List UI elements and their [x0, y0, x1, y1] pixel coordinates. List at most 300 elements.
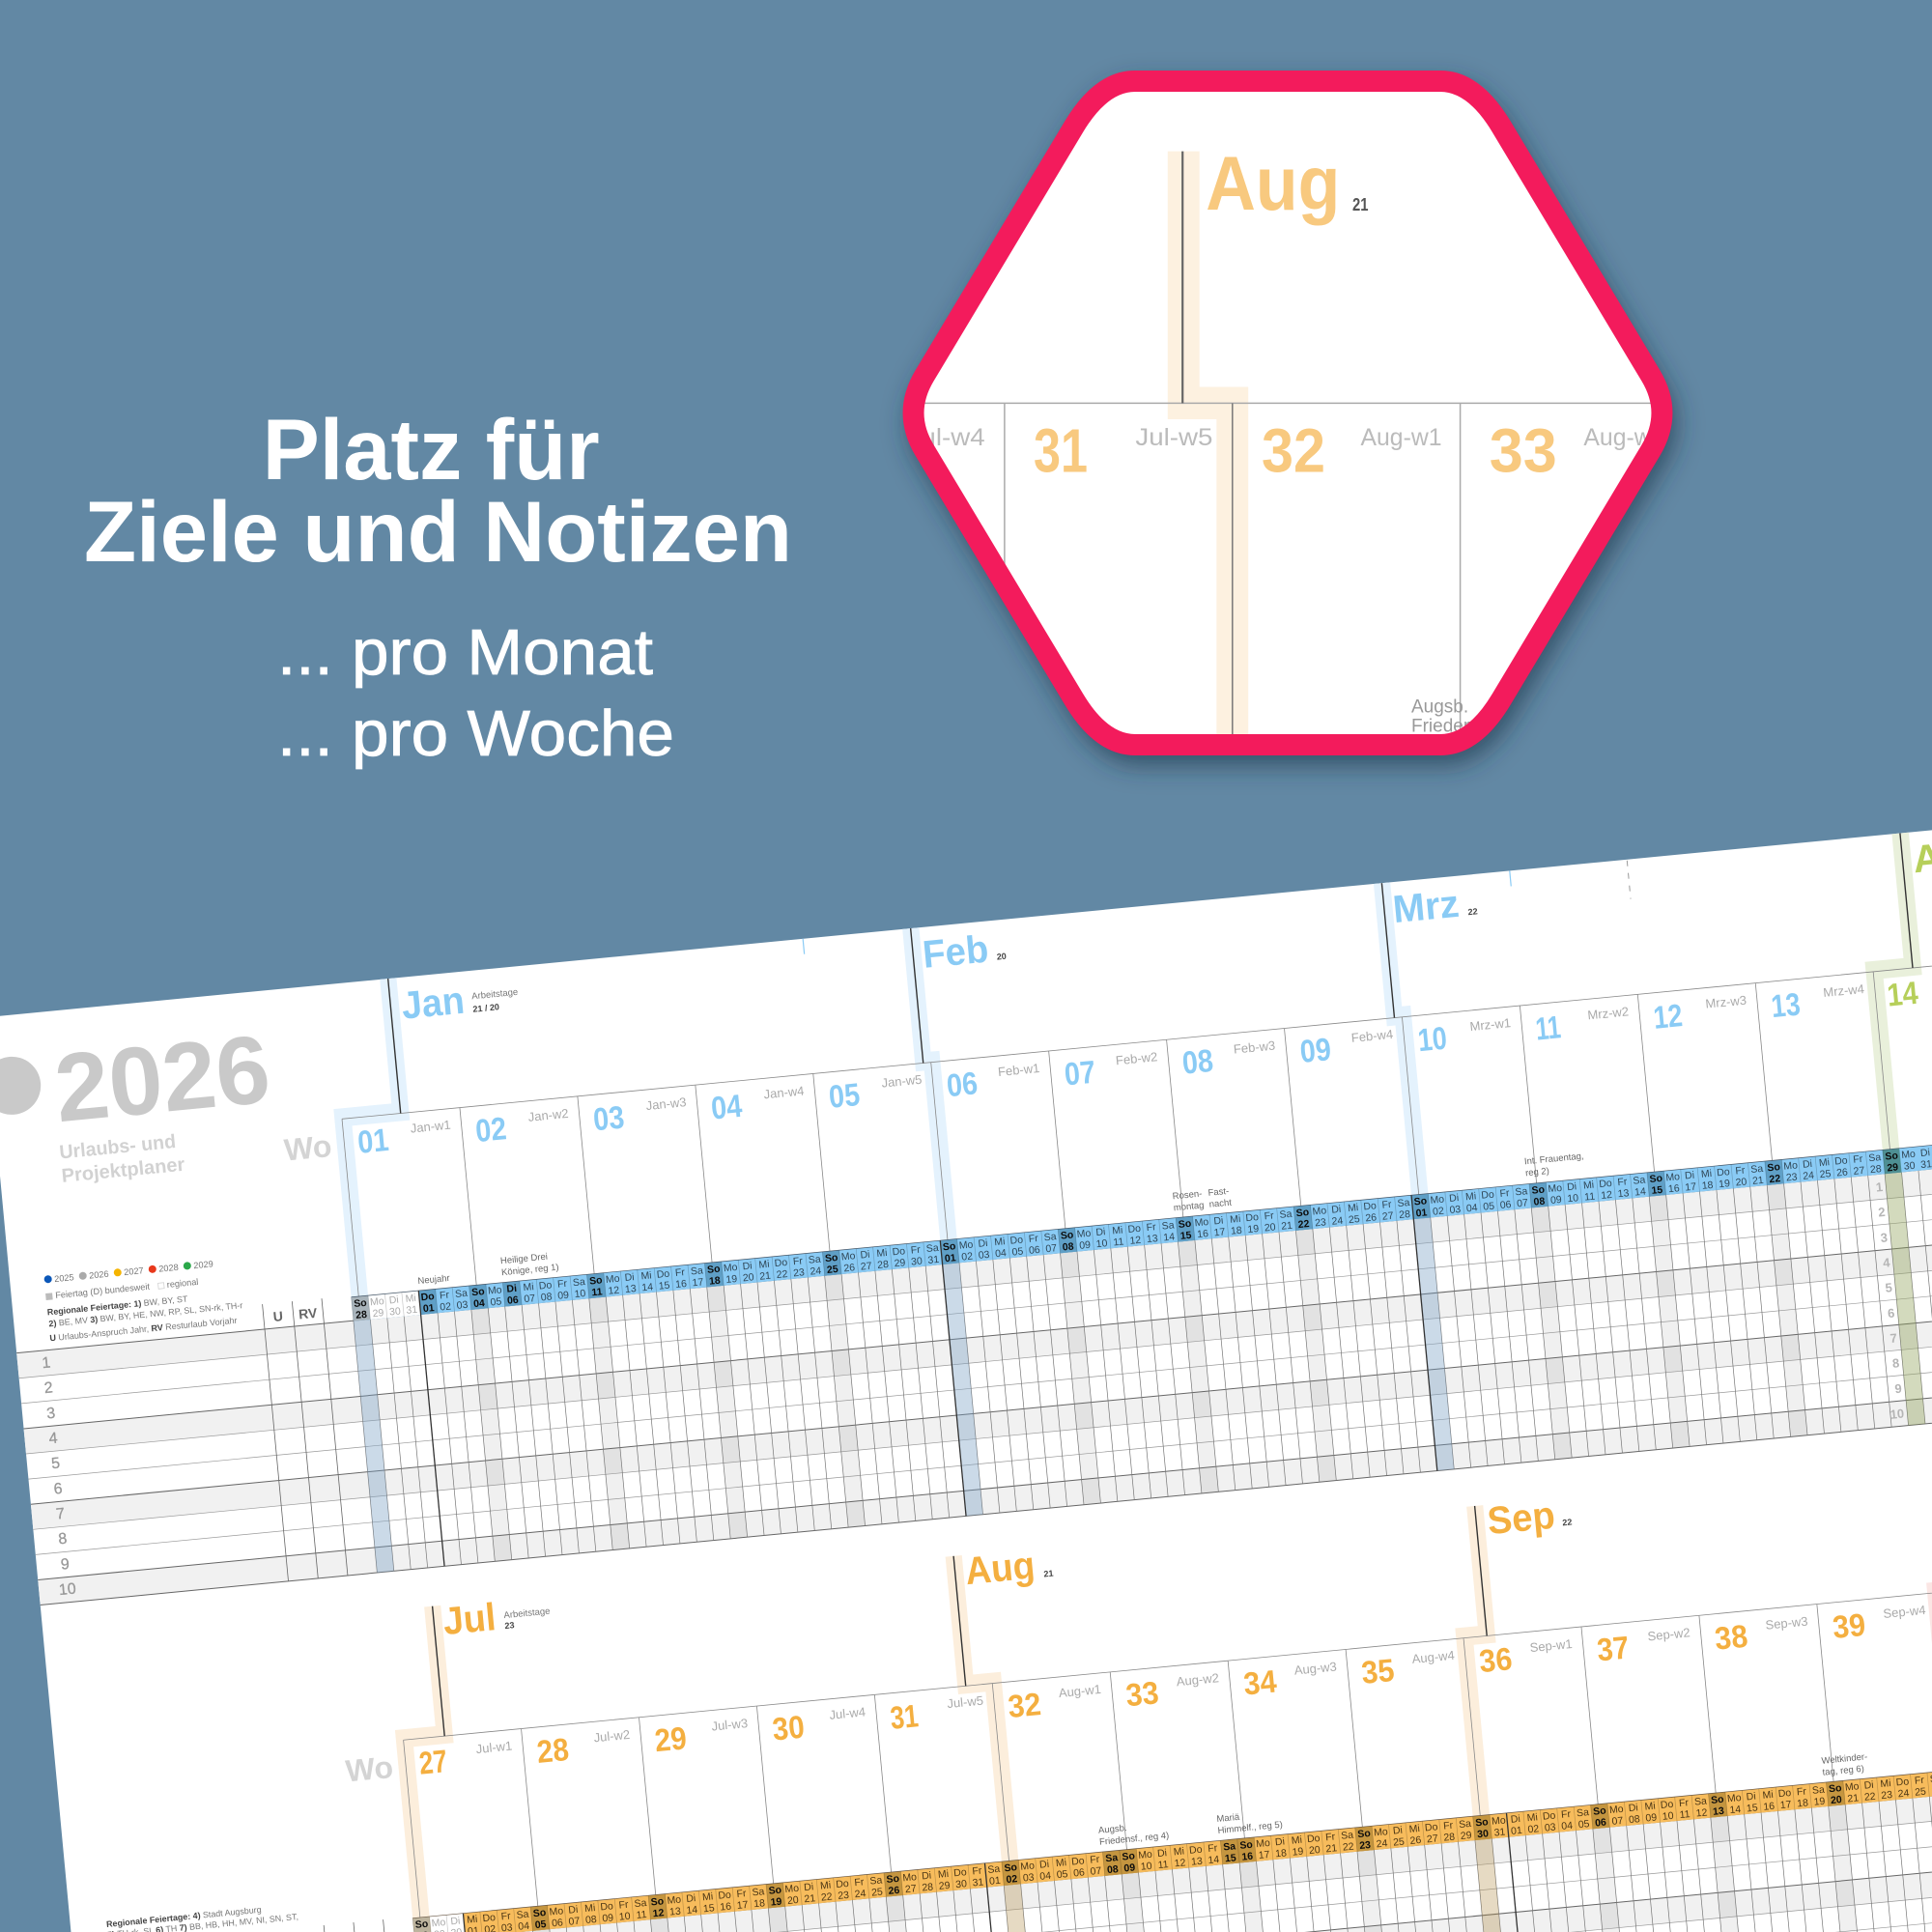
month names: Jul	[441, 1596, 497, 1643]
day header text: Sa	[808, 1254, 821, 1266]
day header text: Fr	[854, 1876, 865, 1889]
day header text: Mi	[820, 1880, 832, 1892]
day header text: Mi	[1465, 1190, 1477, 1203]
block: second half year July to September	[46, 1435, 1932, 1932]
holiday notes: montag	[1173, 1200, 1205, 1213]
day header text: Fr	[736, 1888, 748, 1900]
day header text: 05	[1577, 1818, 1590, 1831]
first-of-month column tints	[354, 1217, 1454, 1573]
day header text: So	[1178, 1218, 1192, 1231]
month names: Arbeitstage	[471, 987, 519, 1002]
day header text: Di	[1274, 1835, 1285, 1848]
april column tint	[1885, 1172, 1925, 1426]
day header text: Do	[1307, 1833, 1321, 1845]
day header text: Mi	[1173, 1845, 1185, 1858]
week numbers: 08	[1180, 1042, 1214, 1081]
week numbers: 35	[1360, 1652, 1396, 1690]
day header text: Sa	[1515, 1185, 1528, 1198]
week numbers: 07	[1063, 1054, 1097, 1092]
month names: Sep	[1486, 1494, 1557, 1543]
day header text: 24	[1897, 1787, 1910, 1800]
day header text: Di	[1392, 1825, 1403, 1837]
table column heads	[272, 1305, 319, 1324]
day header text: So	[1475, 1816, 1489, 1829]
week numbers: Feb-w3	[1233, 1038, 1276, 1057]
day header text: Fr	[1735, 1165, 1746, 1178]
day header text: 09	[1123, 1861, 1136, 1874]
day header text: 02	[961, 1251, 974, 1264]
magnified calendar detail: Friedensf., reg 4)	[1411, 717, 1551, 736]
day header text: So	[1885, 1150, 1898, 1163]
row labels right: 5	[1885, 1280, 1893, 1295]
day header text: Di	[1095, 1226, 1106, 1238]
day header text: 17	[1685, 1180, 1697, 1194]
week numbers: 09	[1298, 1031, 1332, 1069]
day header text: 18	[753, 1897, 766, 1910]
week numbers: 04	[709, 1088, 744, 1126]
day header text: 21	[804, 1892, 816, 1905]
magnified calendar detail: 21	[1352, 195, 1368, 214]
day header text: Di	[1331, 1204, 1342, 1216]
day header text: So	[942, 1240, 956, 1253]
day header text: Mo	[370, 1295, 384, 1308]
day header text: 29	[1887, 1161, 1899, 1174]
day header text: Do	[1424, 1821, 1438, 1833]
week numbers: 12	[1652, 997, 1684, 1036]
day header text: 14	[686, 1904, 698, 1917]
day header text: 12	[1601, 1189, 1613, 1202]
day header text: 26	[888, 1885, 900, 1897]
day header text: Do	[1189, 1844, 1203, 1857]
day header text: 01	[422, 1302, 435, 1315]
day header text: 20	[787, 1894, 799, 1907]
day header text: 08	[1628, 1813, 1640, 1826]
day header text: Mo	[784, 1883, 800, 1895]
day header text: Fr	[1499, 1187, 1510, 1200]
day header text: 12	[1129, 1235, 1142, 1247]
day header text: Mo	[1138, 1849, 1153, 1861]
week numbers: 33	[1124, 1674, 1160, 1713]
day header text: 25	[871, 1886, 884, 1899]
day header text: 14	[1729, 1804, 1742, 1816]
day header text: Mo	[1020, 1860, 1036, 1873]
day header text: Fr	[972, 1865, 982, 1877]
day header text: 25	[1348, 1213, 1360, 1226]
holiday notes: Rosen-	[1172, 1189, 1203, 1202]
legend: 2) BE, MV 3) BW, BY, HE, NW, RP, SL, SN-rk, TH-r	[48, 1300, 243, 1328]
day header text: 28	[1399, 1208, 1411, 1221]
day header text: 05	[1056, 1868, 1068, 1881]
headline text	[84, 401, 792, 770]
day header text: Sa	[1459, 1818, 1472, 1831]
week numbers: 31	[889, 1697, 920, 1736]
row labels left: 6	[53, 1481, 63, 1498]
day header text: 07	[568, 1916, 581, 1928]
day header text: 16	[675, 1278, 688, 1291]
day header text: 03	[1449, 1204, 1462, 1216]
day header text: Sa	[1341, 1830, 1354, 1842]
day header text: 26	[843, 1262, 856, 1274]
day header text: Mo	[1492, 1814, 1506, 1828]
day header text: So	[824, 1252, 838, 1264]
day header text: 16	[1763, 1801, 1776, 1813]
day header text: Di	[1449, 1192, 1460, 1205]
week numbers: Jan-w4	[763, 1083, 805, 1101]
magnified calendar detail: 32	[1262, 415, 1325, 485]
day header text: Sa	[1279, 1208, 1293, 1221]
day header text: Di	[978, 1237, 988, 1250]
day header text: 13	[1146, 1233, 1158, 1245]
day header text: Di	[686, 1892, 696, 1905]
day header text: Mo	[1726, 1792, 1742, 1804]
week numbers: Sep-w2	[1647, 1625, 1690, 1643]
day header text: Sa	[572, 1276, 586, 1289]
day header text: 07	[1611, 1815, 1624, 1828]
week numbers: Jan-w3	[645, 1094, 687, 1113]
day header text: 22	[1297, 1218, 1310, 1231]
row labels left: 10	[58, 1580, 77, 1599]
day header text: 18	[1275, 1847, 1288, 1860]
day header text: Do	[1660, 1799, 1674, 1811]
day header background	[352, 1143, 1932, 1321]
day header text: 09	[1079, 1239, 1092, 1252]
day header text: Di	[1863, 1779, 1874, 1792]
day header text: 18	[1231, 1225, 1242, 1237]
day header text: 27	[904, 1883, 917, 1895]
day header text: 15	[1746, 1802, 1758, 1814]
Wo label: Wo	[344, 1749, 394, 1789]
day header text: So	[1122, 1850, 1135, 1863]
day header text: 10	[1140, 1861, 1152, 1873]
day header text: Do	[1717, 1166, 1730, 1179]
day header text: Di	[1919, 1147, 1930, 1159]
day header text: Sa	[1750, 1163, 1764, 1176]
day header text: Mo	[1665, 1171, 1681, 1183]
day header text: 06	[552, 1917, 564, 1929]
headline text: Platz für	[263, 401, 600, 497]
day header text: 20	[1264, 1221, 1276, 1234]
legend: Regionale Feiertage: 1) BW, BY, ST	[46, 1293, 188, 1317]
day header text: 20	[1735, 1176, 1747, 1189]
day header text: 27	[1853, 1165, 1865, 1178]
day header text: 09	[557, 1290, 570, 1302]
day header text: Do	[482, 1912, 497, 1924]
day header text: 23	[1881, 1789, 1893, 1802]
day header text: 29	[1460, 1830, 1472, 1842]
magnified calendar detail	[925, 151, 1650, 734]
day header text: Mi	[1644, 1801, 1656, 1813]
day header text: Sa	[1397, 1197, 1410, 1209]
week numbers: 06	[945, 1065, 980, 1103]
day header text: Mi	[1818, 1156, 1831, 1169]
day header text: 15	[1224, 1852, 1236, 1864]
bold month grid lines	[463, 1813, 1532, 1932]
legend: U Urlaubs-Anspruch Jahr, RV Resturlaub Vorjahr	[49, 1316, 238, 1343]
week numbers: 28	[535, 1731, 570, 1770]
month bands	[322, 833, 1932, 1297]
day header text: Fr	[500, 1910, 512, 1922]
day header text: Sa	[1105, 1852, 1119, 1864]
day header text: 15	[1651, 1184, 1663, 1197]
day header text: 25	[1819, 1168, 1832, 1180]
day header text: Sa	[1633, 1175, 1646, 1187]
day header text: Fr	[910, 1244, 922, 1257]
day header text: Mo	[1312, 1205, 1327, 1218]
day header text: 22	[820, 1891, 833, 1904]
magnified calendar detail: Aug-w1	[1360, 424, 1441, 451]
day header text: 05	[1011, 1245, 1024, 1259]
day header text: Mo	[1609, 1804, 1624, 1816]
row labels right: 8	[1891, 1355, 1900, 1371]
day header text: Fr	[1796, 1785, 1807, 1798]
holiday notes	[416, 1151, 1585, 1287]
day header text	[414, 1773, 1932, 1932]
month names: Aug	[963, 1544, 1037, 1593]
week numbers: Jan-w5	[881, 1072, 923, 1091]
subtitle: Projektplaner	[61, 1154, 185, 1187]
day header background	[412, 1761, 1932, 1932]
day header text: Sa	[634, 1897, 647, 1910]
holiday notes: Könige, reg 1)	[501, 1263, 559, 1278]
day header text: Mi	[1112, 1225, 1123, 1237]
day header text: Mo	[1901, 1149, 1917, 1161]
day header text: 31	[406, 1304, 418, 1317]
day header text: 22	[1863, 1791, 1876, 1804]
week numbers: 11	[1534, 1009, 1562, 1047]
week numbers: Jul-w4	[829, 1704, 867, 1722]
day header text: So	[1767, 1161, 1780, 1174]
day header text: 22	[1342, 1841, 1354, 1854]
week numbers	[417, 1601, 1928, 1781]
day header text: Do	[1542, 1809, 1556, 1823]
day header text: Do	[1834, 1154, 1848, 1168]
legend: 2026	[89, 1269, 109, 1281]
week numbers: Mrz-w3	[1705, 993, 1747, 1011]
day header text: 21	[1752, 1175, 1764, 1187]
row labels right: 1	[1875, 1179, 1884, 1195]
subtitle: Urlaubs- und	[58, 1131, 177, 1163]
month names: 21 / 20	[472, 1002, 499, 1014]
day header text: 23	[1359, 1839, 1372, 1852]
Wo label: Wo	[283, 1128, 333, 1168]
week numbers: Feb-w2	[1115, 1049, 1158, 1067]
magnified calendar detail: Aug-w2	[1583, 424, 1664, 451]
day header text: 06	[506, 1294, 519, 1307]
block: first half year January to March	[0, 812, 1932, 1605]
day header text: Mi	[1526, 1811, 1538, 1824]
day header text: Mo	[723, 1262, 738, 1274]
day header text: Fr	[1561, 1808, 1572, 1821]
day header text: 17	[692, 1276, 704, 1289]
day header text: 27	[860, 1261, 872, 1273]
day header text: 07	[1045, 1242, 1058, 1255]
month names: 21	[1043, 1569, 1054, 1578]
day header text: 06	[1073, 1866, 1086, 1879]
week numbers: Mrz-w1	[1469, 1015, 1512, 1034]
day header text: Di	[1157, 1847, 1168, 1860]
day header text: Mo	[549, 1905, 564, 1918]
day header text: Di	[860, 1249, 870, 1262]
day header text: Fr	[1325, 1831, 1336, 1843]
week numbers: 32	[1007, 1686, 1042, 1724]
day header text: Mi	[702, 1890, 714, 1903]
day header text: 29	[894, 1257, 906, 1269]
day header text: Do	[1777, 1787, 1792, 1800]
day header text: Fr	[674, 1266, 686, 1279]
day header text: Mo	[431, 1917, 446, 1929]
day header text: Do	[1071, 1855, 1085, 1868]
day header text: 26	[1409, 1834, 1422, 1847]
day header text: 29	[938, 1880, 951, 1892]
day header text: 13	[1713, 1805, 1725, 1818]
grid	[75, 1745, 1932, 1932]
holiday notes: Himmelf., reg 5)	[1217, 1820, 1283, 1836]
day header text: Fr	[1146, 1221, 1157, 1234]
day header text: 14	[1634, 1186, 1646, 1199]
day header text: 21	[1325, 1842, 1338, 1855]
title 2026: 2026	[50, 1015, 274, 1143]
day header text: 09	[1549, 1194, 1562, 1207]
week numbers: Sep-w1	[1529, 1636, 1573, 1655]
magnifier hexagon	[889, 81, 1690, 755]
week numbers: Jul-w5	[947, 1693, 984, 1711]
row labels right: 10	[1889, 1406, 1905, 1422]
day header text: 07	[1517, 1197, 1529, 1209]
week numbers: 30	[771, 1709, 806, 1747]
day header text: 26	[1365, 1211, 1378, 1224]
row labels right: 7	[1889, 1330, 1897, 1346]
day header text: Mo	[1844, 1780, 1860, 1794]
day header text: Sa	[1161, 1219, 1175, 1233]
week numbers: 27	[417, 1743, 449, 1781]
day header text: 14	[1163, 1231, 1176, 1243]
hexagon fill	[914, 81, 1662, 745]
day header text: Fr	[1679, 1797, 1690, 1809]
day header text: 05	[1483, 1201, 1495, 1213]
legend	[43, 1257, 244, 1343]
month names: 23	[504, 1620, 515, 1631]
day header text: Mo	[605, 1273, 620, 1286]
day header text: Fr	[556, 1278, 568, 1291]
row labels left: 7	[55, 1506, 66, 1523]
day header text: 08	[540, 1291, 553, 1303]
day header text: 20	[742, 1271, 754, 1284]
day header text: 28	[877, 1259, 890, 1271]
day header text: Sa	[1223, 1840, 1236, 1854]
day header text: Do	[1363, 1200, 1378, 1213]
day header text: 30	[389, 1305, 401, 1319]
holiday notes: tag, reg 6)	[1822, 1764, 1864, 1778]
day header text: 22	[1769, 1173, 1781, 1185]
day header text: 23	[1315, 1216, 1327, 1229]
day header text: 12	[608, 1285, 620, 1297]
week numbers: Mrz-w4	[1823, 981, 1864, 1000]
day header text: So	[589, 1274, 603, 1288]
table column heads: U	[272, 1308, 284, 1324]
day header text: Sa	[690, 1264, 703, 1277]
day header text: 08	[1062, 1240, 1074, 1254]
day header text: Di	[1803, 1158, 1813, 1171]
day header text: Sa	[1693, 1795, 1708, 1808]
day header text: 12	[652, 1907, 665, 1919]
table column heads: RV	[298, 1305, 319, 1322]
day header text: 19	[1292, 1846, 1304, 1859]
row labels left: 3	[46, 1406, 56, 1422]
week numbers: Aug-w2	[1176, 1670, 1219, 1689]
day header text: Do	[774, 1257, 788, 1269]
month names	[400, 833, 1932, 1028]
day header text: 10	[1095, 1237, 1108, 1250]
day header text: Mo	[667, 1894, 682, 1907]
day header text: So	[1060, 1229, 1074, 1242]
day header text: 30	[911, 1256, 923, 1268]
day header text: Di	[804, 1881, 814, 1893]
week numbers: 01	[356, 1122, 390, 1160]
day header text: Do	[600, 1900, 614, 1914]
row labels left: 2	[43, 1379, 54, 1397]
day header text: 04	[995, 1247, 1008, 1260]
day header text: 13	[669, 1906, 681, 1918]
day header text: Di	[1567, 1180, 1577, 1193]
day header text: 21	[759, 1270, 772, 1283]
day header text: Di	[624, 1271, 635, 1284]
holiday notes: reg 2)	[1525, 1166, 1549, 1179]
day header text: Mo	[840, 1250, 856, 1264]
day header text: So	[532, 1907, 547, 1919]
day header text: Mo	[1374, 1826, 1388, 1839]
holiday notes: Int. Frauentag,	[1524, 1151, 1584, 1167]
holiday notes: Heilige Drei	[500, 1252, 548, 1266]
day header text: Do	[538, 1279, 553, 1293]
day header text: 18	[709, 1275, 721, 1288]
day header text: Mo	[1076, 1228, 1092, 1240]
day header text: 10	[618, 1911, 631, 1923]
day header text: Mi	[584, 1902, 596, 1915]
day header text: 21	[1847, 1792, 1860, 1804]
day header text: 09	[1645, 1811, 1658, 1825]
day header text: 06	[1028, 1244, 1040, 1257]
legend second half: Regionale Feiertage: 4) Stadt Augsburg	[106, 1905, 262, 1929]
day header text: 30	[1903, 1160, 1916, 1173]
day header text: So	[1649, 1173, 1663, 1185]
day header text: 09	[602, 1912, 614, 1924]
day header text: 24	[854, 1888, 867, 1900]
day header text: Do	[1127, 1223, 1142, 1236]
panel: tilted calendar sheet	[0, 805, 1932, 1932]
day header text: Di	[1746, 1791, 1756, 1803]
day header text: Mo	[1548, 1182, 1563, 1195]
month names	[441, 1492, 1574, 1643]
day header text: Di	[568, 1904, 579, 1917]
day header text: 31	[927, 1254, 940, 1266]
day header text: 13	[624, 1283, 637, 1295]
day header text: 27	[1381, 1210, 1394, 1223]
day header text: Fr	[1617, 1176, 1628, 1188]
day header text: 11	[591, 1286, 603, 1298]
day header text: 25	[1915, 1786, 1927, 1799]
month names: 22	[1467, 906, 1478, 917]
day header text: 01	[989, 1875, 1001, 1888]
day header text: 10	[1567, 1192, 1579, 1205]
day header text: Sa	[1043, 1231, 1057, 1243]
row labels right	[1868, 1179, 1906, 1422]
day header text: Mi	[1762, 1789, 1774, 1802]
day header text: 16	[1667, 1182, 1680, 1195]
day header text: Mo	[902, 1871, 918, 1884]
day header text: Do	[718, 1889, 731, 1902]
day header text: Mi	[405, 1293, 416, 1305]
day header text: So	[1357, 1828, 1371, 1840]
